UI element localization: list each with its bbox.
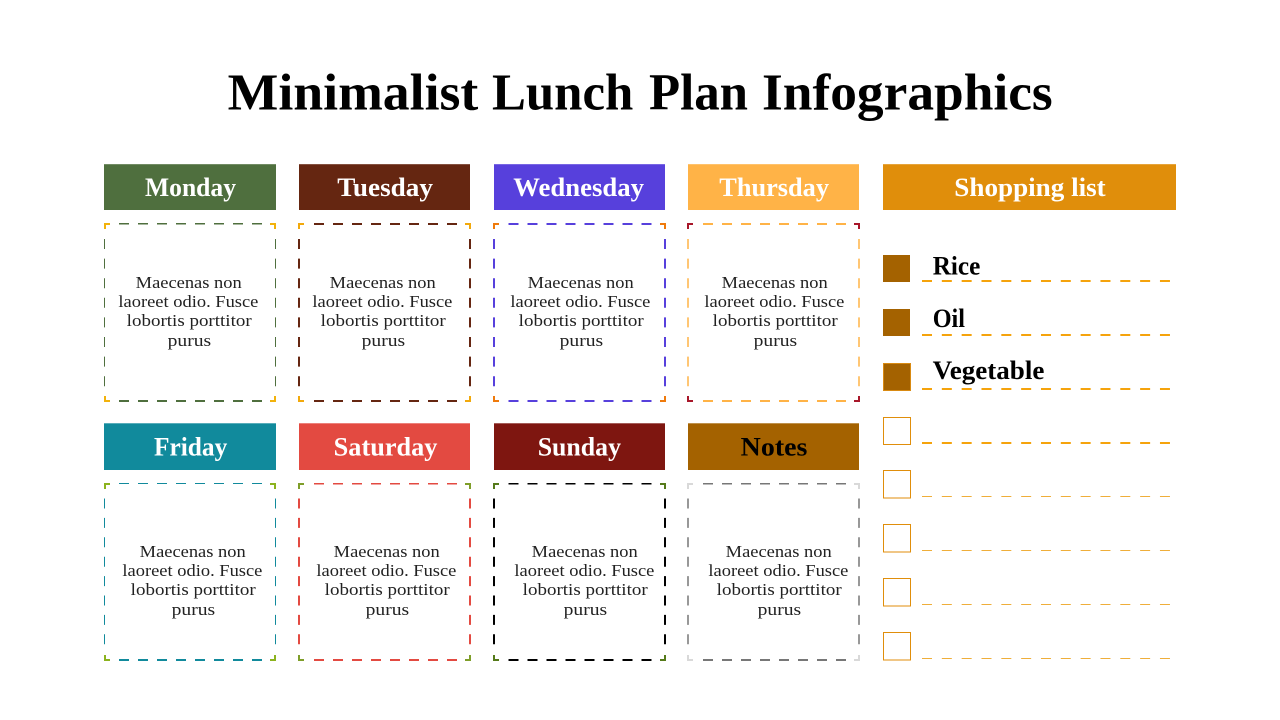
header: Shopping list	[883, 164, 1176, 210]
header: Tuesday	[299, 164, 470, 210]
text: Tuesday: Maecenas non	[330, 273, 436, 292]
text: Sunday	[514, 542, 654, 619]
header: Notes	[688, 423, 859, 470]
text: Notes: lobortis porttitor	[717, 580, 842, 599]
text: Saturday: purus	[366, 600, 409, 619]
header: Sunday	[494, 423, 665, 470]
title	[228, 64, 1053, 122]
empty item 6	[884, 524, 1170, 552]
header: Saturday: Saturday	[334, 432, 437, 462]
title: Plan	[649, 64, 748, 122]
empty item 8	[884, 632, 1170, 660]
text: Saturday: lobortis porttitor	[325, 580, 450, 599]
header: Friday	[104, 423, 276, 470]
item: Oil	[883, 304, 1170, 336]
text: Notes	[708, 542, 848, 619]
text: Thursday: laoreet odio. Fusce	[704, 292, 844, 311]
text: Monday: lobortis porttitor	[127, 311, 252, 330]
text: Sunday: purus	[564, 600, 607, 619]
item: Rice	[883, 252, 1170, 282]
header: Sunday: Sunday	[538, 432, 621, 462]
text: Sunday: laoreet odio. Fusce	[514, 561, 654, 580]
item: Oil: Oil	[933, 304, 965, 333]
dashed box: Thursday	[688, 224, 859, 401]
dashed box: Tuesday	[299, 224, 470, 401]
text: Saturday: laoreet odio. Fusce	[316, 561, 456, 580]
text: Saturday: Maecenas non	[334, 542, 440, 561]
dashed box: Wednesday	[494, 224, 665, 401]
panel: Friday	[104, 423, 276, 660]
header: Wednesday	[494, 164, 665, 210]
text: Wednesday	[510, 273, 650, 350]
panel: Thursday	[688, 164, 859, 401]
text: Tuesday	[312, 273, 452, 350]
text: Monday	[118, 273, 258, 350]
panel: Monday	[104, 164, 276, 401]
text: Friday	[122, 542, 262, 619]
header: Tuesday: Tuesday	[337, 173, 433, 202]
panel: Wednesday	[494, 164, 665, 401]
panel: Sunday	[494, 423, 665, 660]
text: Friday: Maecenas non	[140, 542, 246, 561]
text: Tuesday: purus	[362, 331, 405, 350]
text: Wednesday: laoreet odio. Fusce	[510, 292, 650, 311]
header: Monday	[104, 164, 276, 210]
text: Sunday: lobortis porttitor	[523, 580, 648, 599]
text: Friday: purus	[172, 600, 215, 619]
item: Vegetable: Vegetable	[933, 356, 1044, 385]
item: Rice: Rice	[933, 252, 980, 280]
text: Friday: lobortis porttitor	[131, 580, 256, 599]
header: Saturday	[299, 423, 470, 470]
dashed box: Friday	[104, 484, 276, 660]
header: Monday: Monday	[145, 173, 236, 202]
text: Notes: laoreet odio. Fusce	[708, 561, 848, 580]
text: Tuesday: lobortis porttitor	[321, 311, 446, 330]
title: Lunch	[492, 64, 633, 122]
header: Wednesday: Wednesday	[513, 173, 644, 202]
panel: Saturday	[299, 423, 470, 660]
panel: Tuesday	[299, 164, 470, 401]
text: Friday: laoreet odio. Fusce	[122, 561, 262, 580]
header: Shopping list: Shopping list	[954, 173, 1106, 202]
header: Thursday	[688, 164, 859, 210]
text: Monday: purus	[168, 331, 211, 350]
panel: Notes	[688, 423, 859, 660]
header: Notes: Notes	[741, 432, 807, 462]
text: Notes: purus	[758, 600, 801, 619]
empty item 7	[884, 578, 1170, 606]
text: Notes: Maecenas non	[726, 542, 832, 561]
text: Saturday	[316, 542, 456, 619]
text: Thursday: purus	[754, 331, 797, 350]
empty item 5	[884, 470, 1170, 498]
text: Thursday: Maecenas non	[722, 273, 828, 292]
header: Friday: Friday	[154, 432, 227, 462]
text: Wednesday: purus	[560, 331, 603, 350]
title: Minimalist	[228, 64, 479, 122]
panel: Shopping list	[883, 164, 1176, 660]
text: Thursday: lobortis porttitor	[713, 311, 838, 330]
text: Tuesday: laoreet odio. Fusce	[312, 292, 452, 311]
dashed box: Monday	[104, 224, 276, 401]
text: Wednesday: lobortis porttitor	[519, 311, 644, 330]
dashed box: Saturday	[299, 484, 470, 660]
text: Monday: laoreet odio. Fusce	[118, 292, 258, 311]
item: Vegetable	[884, 356, 1170, 390]
text: Thursday	[704, 273, 844, 350]
text: Monday: Maecenas non	[136, 273, 242, 292]
empty item 4	[884, 418, 1170, 444]
dashed box: Sunday	[494, 484, 665, 660]
dashed box: Notes	[688, 484, 859, 660]
text: Sunday: Maecenas non	[532, 542, 638, 561]
text: Wednesday: Maecenas non	[528, 273, 634, 292]
title: Infographics	[762, 64, 1053, 122]
header: Thursday: Thursday	[719, 173, 829, 202]
